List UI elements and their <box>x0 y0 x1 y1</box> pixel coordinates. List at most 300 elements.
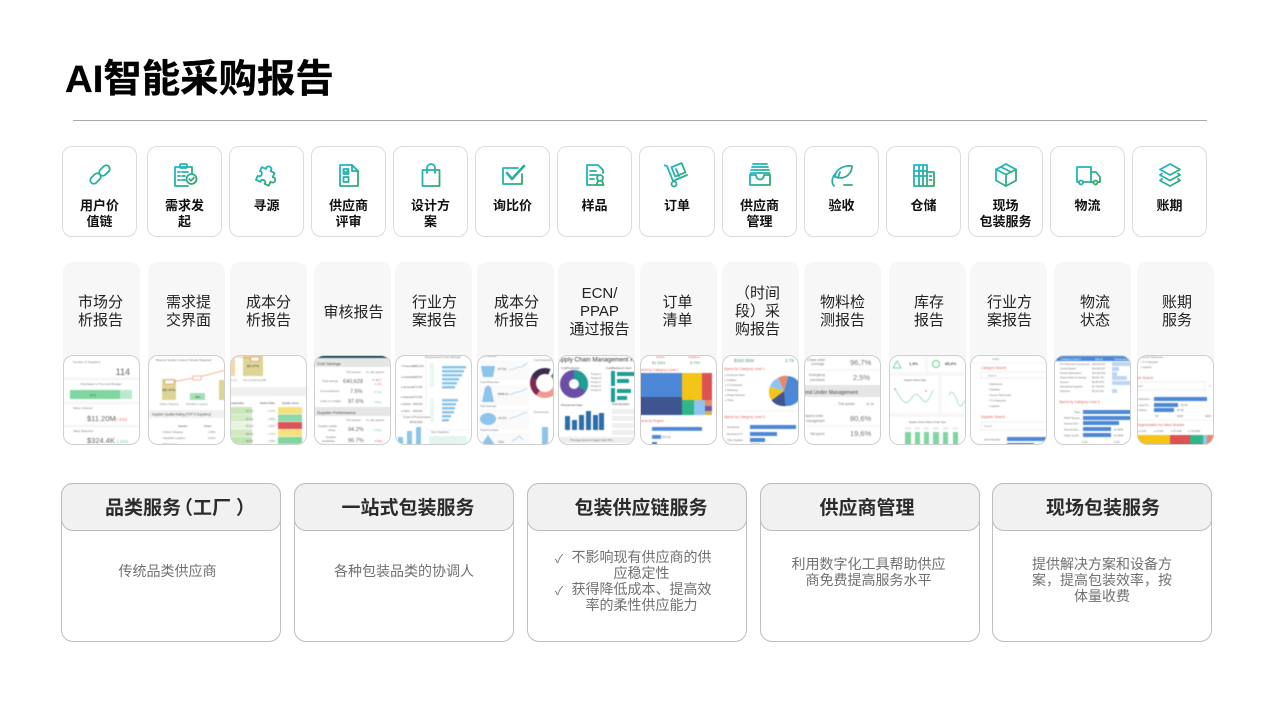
report column: 行业方案报告 <box>395 294 472 445</box>
dashboard thumbnail: segmentation: Segmentation by Value Bracket <box>1137 423 1184 427</box>
heading: 状态 <box>1080 312 1110 329</box>
dashboard thumbnail: category table: $1.9M/M <box>1114 434 1123 438</box>
dashboard thumbnail: quality table: 1.85% <box>268 439 276 443</box>
panel: 现场包装服务 <box>992 483 1212 642</box>
dashboard thumbnail: quality table: 1.97% <box>268 409 276 413</box>
dashboard thumbnail: supplier numbers: Value Ordered <box>73 406 93 410</box>
dashboard thumbnail: savings KPIs with donut: 73% <box>498 440 504 444</box>
process row <box>62 146 1207 237</box>
card: 样品 <box>557 146 632 237</box>
dashboard thumbnail: supply chain KPI: Cost/Production <box>561 366 580 370</box>
heading: 通过报告 <box>569 321 630 338</box>
heading: 库存 <box>914 294 944 311</box>
dashboard thumbnail: supply chain KPI: Product B <box>591 377 602 380</box>
heading <box>1137 262 1214 362</box>
panel heading: 供应商管理 <box>819 498 914 519</box>
dashboard thumbnail: cost savings: Costs vs. budget <box>320 399 341 403</box>
dashboard thumbnail: supplier numbers: 114 <box>116 367 130 377</box>
dashboard thumbnail: segmentation: ↗ <box>1208 383 1211 388</box>
report column: 账期服务 <box>1137 294 1214 445</box>
label: 值链 <box>86 214 112 229</box>
heading: 案报告 <box>987 312 1032 329</box>
heading: 订单 <box>662 294 692 311</box>
icon: link <box>89 164 111 185</box>
heading <box>477 262 554 362</box>
dashboard thumbnail: vendor costs: Supplier <box>178 424 188 428</box>
dashboard thumbnail: segmentation: $10M <box>1177 415 1183 418</box>
card: 仓储 <box>886 146 961 237</box>
dashboard thumbnail: segmentation: tro Electr... <box>1137 409 1149 412</box>
label: 询比价 <box>493 198 532 213</box>
icon: buildings <box>913 164 935 187</box>
label: 验收 <box>828 198 854 213</box>
panel text: 各种包装品类的协调人 <box>334 563 474 579</box>
panel heading <box>527 483 747 531</box>
dashboard thumbnail: cost savings: Supplier quality <box>318 424 338 428</box>
dashboard thumbnail: supplier numbers: Number of Suppliers <box>73 360 101 364</box>
dashboard thumbnail: procurement cost savings: €532,500 <box>410 420 423 424</box>
dashboard thumbnail: vendor costs: • WorldNet Logistics <box>162 436 186 440</box>
dashboard thumbnail: procurement cost savings: €65,000 <box>413 409 423 413</box>
dashboard thumbnail: segmentation: ▫ Logistics <box>1140 365 1152 369</box>
heading <box>558 262 635 362</box>
dashboard thumbnail: quality table: 88.2% <box>246 439 254 443</box>
dashboard thumbnail: procurement cost savings: €72,500 <box>413 385 423 389</box>
dashboard thumbnail: segmentation: ● 10-50k <box>1154 430 1164 433</box>
dashboard thumbnail: category table: Printed Fabrications <box>1060 372 1082 375</box>
heading: 析报告 <box>246 312 291 329</box>
dashboard thumbnail: vendor costs: $2K (47%) <box>162 388 176 392</box>
dashboard thumbnail: stock lines: Supplier Defect Rate <box>904 379 927 382</box>
dashboard thumbnail: vendor costs: 1.96% <box>208 430 216 434</box>
dashboard thumbnail: segmentation: ● 100-500k <box>1188 430 1201 433</box>
heading <box>230 262 307 362</box>
dashboard thumbnail: procurement cost savings: €566,200 <box>413 364 424 368</box>
dashboard thumbnail: segmentation <box>1137 355 1214 445</box>
dashboard thumbnail: pie chart: ● Production Parts <box>725 374 746 377</box>
dashboard thumbnail: category table: Pre-Fabricated Components <box>1060 363 1091 366</box>
label <box>165 198 204 229</box>
label: 现场 <box>992 198 1018 213</box>
dashboard thumbnail: segmentation: $20M <box>1205 415 1211 418</box>
dashboard thumbnail: spend under management: purchases <box>810 378 825 382</box>
dashboard thumbnail: treemap: Orders <box>656 355 665 359</box>
dashboard thumbnail: pie chart: ● Private Business <box>725 394 746 397</box>
card: 询比价 <box>475 146 550 237</box>
dashboard thumbnail: procurement cost savings: Costs of Procurement <box>403 415 430 419</box>
icon: truck <box>1076 166 1101 186</box>
dashboard thumbnail: category table: Tapes <box>1074 411 1081 414</box>
heading <box>722 262 799 362</box>
panel: 供应商管理 <box>760 483 980 642</box>
dashboard thumbnail: supplier numbers: (-1%) <box>117 439 129 444</box>
dashboard thumbnail: category table: 5.0M <box>1114 441 1119 444</box>
dashboard thumbnail: pie chart: ● Marketing <box>725 389 738 392</box>
dashboard thumbnail: vendor costs: WorldNet Logistics <box>186 402 208 406</box>
dashboard thumbnail: supplier numbers <box>63 355 140 445</box>
panel heading <box>992 483 1212 531</box>
heading <box>1054 262 1131 362</box>
dashboard thumbnail: supplier numbers: 81% <box>90 393 96 397</box>
dashboard thumbnail: stock lines: Supplier Defect Rate & Order Type <box>909 421 947 424</box>
report column: 订单清单 <box>640 294 717 445</box>
dashboard thumbnail: segmentation: ▫ Human Resources <box>1140 355 1164 359</box>
dashboard thumbnail: spend under management: 2,5% <box>853 373 870 382</box>
dashboard thumbnail: vendor costs: Defect <box>204 424 212 428</box>
panel: 包装供应链服务 <box>527 483 747 642</box>
dashboard thumbnail: pie chart: ● Facilities <box>725 379 737 382</box>
report column: 审核报告 <box>314 304 391 445</box>
dashboard thumbnail: pie chart: ● Travel <box>725 399 734 402</box>
dashboard thumbnail: cost savings: ▼ 4677 <box>372 378 382 382</box>
dashboard thumbnail: vendor costs: Supplier Quality Rating (TOP 5 Suppliers) <box>152 412 211 416</box>
card: 供应商管理 <box>722 146 797 237</box>
label: 设计方 <box>411 198 450 213</box>
dashboard thumbnail: spend under management: vs. la <box>866 402 874 406</box>
report column: 库存报告 <box>889 294 966 445</box>
dashboard thumbnail: category search: ▫ Facilities <box>988 388 1000 392</box>
label: 用户价 <box>80 198 119 213</box>
panel checklist <box>555 549 712 613</box>
dashboard thumbnail: cost savings: availability <box>322 439 336 443</box>
heading: 行业方 <box>412 294 457 311</box>
label: 包装服务 <box>979 214 1032 229</box>
heading: 账期 <box>1162 294 1192 311</box>
dashboard thumbnail: supply chain KPI: Product C <box>591 381 602 384</box>
dashboard thumbnail: category table: Pallets and Pr... <box>1064 434 1081 438</box>
icon: puzzle <box>255 166 276 187</box>
dashboard thumbnail: supplier numbers: $324.4K <box>87 436 115 445</box>
panel text: 案，提高包装效率，按 <box>1032 572 1172 588</box>
dashboard thumbnail: supply chain KPI: Procurement Data <box>561 403 583 407</box>
dashboard thumbnail: category search: Search <box>988 374 997 378</box>
heading: 购报告 <box>735 321 780 338</box>
heading: 案报告 <box>412 312 457 329</box>
heading: ECN/ <box>582 285 617 302</box>
heading: 服务 <box>1162 312 1192 329</box>
dashboard thumbnail: category table: Security Serv... <box>1064 422 1080 426</box>
dashboard thumbnail: spend under management: 80,6% <box>850 414 872 423</box>
dashboard thumbnail: spend under management: This quarter <box>838 402 856 406</box>
dashboard thumbnail: procurement cost savings: ● Services <box>401 385 414 389</box>
dashboard thumbnail: category search: Search <box>984 424 993 428</box>
panel checklist: 不影响现有供应商的供 <box>572 549 712 565</box>
label <box>329 198 368 229</box>
label: 订单 <box>664 198 690 213</box>
panel checklist: 应稳定性 <box>614 565 670 581</box>
dashboard thumbnail: quality table: ce Co <box>230 378 237 382</box>
dashboard thumbnail: pie chart: Electrical & TC <box>727 433 743 436</box>
dashboard thumbnail: supply chain KPI: Product D <box>591 385 602 388</box>
dashboard thumbnail: quality table <box>230 355 307 445</box>
panel text: 传统品类供应商 <box>118 563 216 579</box>
dashboard thumbnail: supply chain KPI: Product E <box>591 389 602 392</box>
card: 现场包装服务 <box>968 146 1043 237</box>
dashboard thumbnail: cost savings: Supplier Performance <box>317 410 356 415</box>
dashboard thumbnail: spend under management: 19,6% <box>850 429 872 438</box>
heading: 析报告 <box>78 312 123 329</box>
panel: 品类服务（工厂） <box>61 483 281 642</box>
icon: cube <box>995 163 1017 187</box>
dashboard thumbnail: pie chart: Spend by Category Level 3 <box>724 415 765 419</box>
dashboard thumbnail: category table: Category Level 3 <box>1061 357 1081 361</box>
dashboard thumbnail: savings KPIs with donut: Year Savings <box>480 404 497 408</box>
label: 管理 <box>746 214 772 229</box>
heading: 析报告 <box>494 312 539 329</box>
card: 设计方案 <box>393 146 468 237</box>
dashboard thumbnail: cost savings: €40,628 <box>343 379 363 385</box>
dashboard thumbnail: category table: Transactions <box>1114 357 1129 361</box>
dashboard thumbnail: supplier numbers: Purchases in Time and Budget <box>81 382 122 386</box>
heading: PPAP <box>580 303 619 320</box>
label: 案 <box>424 214 437 229</box>
dashboard thumbnail: category table: 0.0M <box>1082 441 1087 444</box>
dashboard thumbnail: spend under management: Spend under <box>805 414 824 418</box>
card: 订单 <box>639 146 715 237</box>
label <box>740 198 779 229</box>
heading <box>395 262 472 362</box>
dashboard thumbnail: category table: PMAT Sensors <box>1064 417 1081 420</box>
dashboard thumbnail: pie chart: Mechanical <box>727 426 740 429</box>
dashboard thumbnail: segmentation: 0M <box>1155 415 1158 418</box>
dashboard thumbnail: category table: $14,001,849 <box>1092 372 1106 375</box>
dashboard thumbnail: cost savings: 7.5% <box>350 389 363 395</box>
label <box>979 198 1032 229</box>
panel heading: 现场包装服务 <box>1046 498 1160 519</box>
dashboard thumbnail: supply chain KPI: Total Discipline <box>612 402 630 406</box>
heading: 审核报告 <box>323 304 384 321</box>
dashboard thumbnail: category table: Spend by Category Level 4 <box>1059 400 1100 404</box>
dashboard thumbnail: supply chain KPI <box>558 355 635 445</box>
dashboard thumbnail: vendor costs: Returns Vendor Costs & Vendor Rejected <box>156 358 212 362</box>
card: 需求发起 <box>147 146 222 237</box>
dashboard thumbnail: savings KPIs with donut: Procurement <box>534 410 549 414</box>
heading: （时间 <box>735 285 780 302</box>
heading <box>314 262 391 362</box>
dashboard thumbnail: quality table: 82.4% <box>246 417 254 421</box>
label: 起 <box>178 214 191 229</box>
dashboard thumbnail: segmentation: $5.6M <box>1181 404 1188 407</box>
dashboard thumbnail: cost savings: -1.1% <box>374 382 382 386</box>
dashboard thumbnail: spend under management: 96,7% <box>850 358 872 367</box>
dashboard thumbnail: vendor costs <box>148 355 225 445</box>
panel heading <box>760 483 980 531</box>
dashboard thumbnail: procurement cost savings: ● Mobile <box>401 402 411 406</box>
dashboard thumbnail: cost savings: -9.9pp <box>374 439 383 443</box>
dashboard thumbnail: spend under management: Tail spend <box>810 432 825 436</box>
card: 寻源 <box>229 146 304 237</box>
heading: 测报告 <box>820 312 865 329</box>
dashboard thumbnail: cost savings: 0.9pp <box>374 400 382 404</box>
dashboard thumbnail: quality table: Defect Rate <box>260 401 275 405</box>
icon: clipboard check <box>174 163 198 187</box>
dashboard thumbnail: cost savings <box>314 355 391 445</box>
dashboard thumbnail: segmentation: ● 0-10k <box>1138 430 1147 433</box>
dashboard thumbnail: category search: Category Search <box>981 366 1007 370</box>
panel checklist: 率的柔性供应能力 <box>586 597 698 613</box>
dashboard thumbnail: savings KPIs with donut: Cost Reduction <box>534 358 552 362</box>
heading <box>148 262 225 362</box>
dashboard thumbnail: category table: Spend <box>1095 357 1103 361</box>
heading <box>970 262 1047 362</box>
label: 账期 <box>1156 198 1182 213</box>
dashboard thumbnail: segmentation: ▫ IT & Networks <box>1140 360 1159 364</box>
heading <box>63 262 140 362</box>
dashboard thumbnail: cost savings: Cost avoidance <box>320 389 340 393</box>
heading: 行业方 <box>987 294 1032 311</box>
dashboard thumbnail: supply chain KPI: Cost/Backlog & Count <box>606 366 632 370</box>
dashboard thumbnail: spend under management <box>804 355 881 445</box>
dashboard thumbnail: cost savings: 96.7% <box>348 438 364 444</box>
dashboard thumbnail: procurement cost savings: Procurement Cost Savings <box>425 355 461 359</box>
dashboard thumbnail: treemap: Suppliers <box>688 355 700 359</box>
dashboard thumbnail: stock lines <box>889 355 966 445</box>
label: 物流 <box>1074 198 1100 213</box>
card: 账期 <box>1132 146 1207 237</box>
dashboard thumbnail: cost savings: 94.2% <box>348 427 364 433</box>
icon: checked box <box>502 164 526 185</box>
dashboard thumbnail: category table: $7,749,643 <box>1092 386 1105 388</box>
dashboard thumbnail: cost savings: vs. last quarter <box>366 418 384 422</box>
panel heading <box>294 483 514 531</box>
card: 供应商评审 <box>311 146 386 237</box>
dashboard thumbnail: procurement cost savings <box>395 355 472 445</box>
dashboard thumbnail: segmentation: $4.1M <box>1177 409 1184 412</box>
icon: hand truck <box>664 162 688 188</box>
dashboard thumbnail: supplier numbers: (+2%) <box>115 417 128 422</box>
dashboard thumbnail: treemap: 6,792 <box>690 360 701 365</box>
icon: inbox tray <box>749 163 771 186</box>
heading: 成本分 <box>246 294 291 311</box>
card: 验收 <box>804 146 879 237</box>
dashboard thumbnail: category table: Sensors <box>1060 381 1070 384</box>
dashboard thumbnail: quality table: 1.85% <box>268 417 276 421</box>
dashboard thumbnail: pie chart: $182.5bM <box>734 358 754 363</box>
dashboard thumbnail: treemap <box>640 355 717 445</box>
dashboard thumbnail: spend under management: end Under Management <box>804 390 859 396</box>
dashboard thumbnail: supply chain KPI: This page shows the Supply Chain KPIs <box>570 439 613 442</box>
report column: 行业方案报告 2 <box>970 294 1047 445</box>
dashboard thumbnail: savings KPIs with donut <box>477 355 554 445</box>
label: 样品 <box>581 198 608 213</box>
dashboard thumbnail: savings KPIs with donut: Total Purchase <box>480 428 499 432</box>
dashboard thumbnail: category table: $1.9M/M <box>1114 428 1123 432</box>
dashboard thumbnail: category table: Educational Supplies <box>1060 386 1083 388</box>
dashboard thumbnail: treemap: $273.6K <box>662 436 671 439</box>
report column: 需求提交界面 <box>148 294 225 445</box>
label: 需求发 <box>165 198 204 213</box>
dashboard thumbnail: segmentation: ● 50-100k <box>1171 430 1183 433</box>
title: AI智能采购报告 <box>65 58 334 101</box>
report column: 成本分析报告 2 <box>477 294 554 445</box>
dashboard thumbnail: savings KPIs with donut: €985 M <box>498 392 509 396</box>
dashboard thumbnail: treemap: $1.53m <box>652 360 666 365</box>
dashboard thumbnail: quality table: 85.7% <box>246 432 254 436</box>
dashboard thumbnail: category table: Networks <box>1060 390 1071 393</box>
dashboard thumbnail: cost savings: 3.9pp <box>374 428 382 432</box>
dashboard thumbnail: category table: $16,816,251 <box>1092 363 1106 366</box>
dashboard thumbnail: vendor costs: • Globex Shipping <box>162 430 183 434</box>
dashboard thumbnail: category table: $6,413,391 <box>1092 390 1105 393</box>
dashboard thumbnail: supplier numbers: Value Rejected <box>73 429 93 433</box>
icon: feather <box>831 165 853 187</box>
dashboard thumbnail: spend under management: Emergency <box>809 373 826 377</box>
panel heading: 包装供应链服务 <box>574 498 708 519</box>
icon: form document <box>339 164 359 187</box>
heading <box>804 262 881 362</box>
dashboard thumbnail: procurement cost savings: €88,870 <box>413 375 423 379</box>
dashboard thumbnail: savings KPIs with donut: €772K <box>498 367 507 371</box>
report column: 成本分析报告 <box>230 294 307 445</box>
dashboard thumbnail: category search: ▫ Logistics <box>988 404 1000 408</box>
dashboard thumbnail: stock lines: 1,9% <box>909 361 919 366</box>
icon: layers <box>1159 163 1181 187</box>
dashboard thumbnail: vendor costs: $1K <box>196 395 201 399</box>
dashboard thumbnail: category search: Supplier Search <box>981 415 1005 419</box>
dashboard thumbnail: category table: Plastic Molds & Castings <box>1060 376 1087 380</box>
dashboard thumbnail: category table: $14,623,267 <box>1092 368 1106 370</box>
dashboard thumbnail: category table: $9,830,733 <box>1092 376 1105 380</box>
dashboard thumbnail: stock lines: 85,3% <box>945 361 957 366</box>
icon: shopping bag <box>422 163 440 187</box>
dashboard thumbnail: vendor costs: Globex Shipping <box>159 402 179 406</box>
panel: 一站式包装服务 <box>294 483 514 642</box>
dashboard thumbnail: quality table: Quality Score <box>282 401 299 405</box>
dashboard thumbnail: category search <box>970 355 1047 445</box>
heading: 段）采 <box>735 303 780 320</box>
heading: 交界面 <box>166 312 211 329</box>
panel text: 商免费提高服务水平 <box>806 572 932 588</box>
dashboard thumbnail: segmentation: lier Search <box>1137 376 1153 380</box>
heading: 成本分 <box>494 294 539 311</box>
label <box>411 198 450 229</box>
dashboard thumbnail: cost savings: Supplier <box>326 435 336 439</box>
panel heading: 品类服务（工厂 ） <box>105 498 255 519</box>
dashboard thumbnail: pie chart: 2.79 <box>785 358 794 363</box>
dashboard thumbnail: category search: ▫ Human Resources <box>988 393 1012 397</box>
dashboard thumbnail: category search: 4,811 <box>992 357 1000 361</box>
dashboard thumbnail: cost savings: Cost Savings <box>317 361 341 366</box>
dashboard thumbnail: quality table: Non-Conforming BE <box>243 378 266 382</box>
label: 寻源 <box>253 198 280 213</box>
panel heading: 一站式包装服务 <box>341 498 474 519</box>
heading: 物料检 <box>820 294 865 311</box>
dashboard thumbnail: cost savings: This quarter <box>346 418 361 422</box>
dashboard thumbnail: quality table: 87.1% <box>246 424 254 428</box>
heading: 物流 <box>1080 294 1110 311</box>
report column: ECN/PPAP通过报告 <box>558 285 635 445</box>
panel checklist: 获得降低成本、提高效 <box>572 581 712 597</box>
report column: 物料检测报告 <box>804 294 881 445</box>
dashboard thumbnail: procurement cost savings: €72,000 <box>413 395 423 399</box>
panel text: 提供解决方案和设备方 <box>1032 556 1172 572</box>
heading <box>640 262 717 362</box>
dashboard thumbnail: treemap: pend by Category Level 1 <box>640 368 679 372</box>
dashboard thumbnail: procurement cost savings: Top 5 Suppliers <box>431 430 450 434</box>
dashboard thumbnail: procurement cost savings: ● Office <box>401 409 411 413</box>
label <box>80 198 119 229</box>
heading: 市场分 <box>78 294 123 311</box>
dashboard thumbnail: spend under management: Chase under <box>807 358 826 362</box>
dashboard thumbnail: quality table: 1.65% <box>268 424 276 428</box>
dashboard thumbnail: supply chain KPI: Product A <box>591 373 601 376</box>
dashboard thumbnail: pie chart: ● IT & Networks <box>725 384 743 387</box>
label: 供应商 <box>740 198 779 213</box>
dashboard thumbnail: cost savings: rating <box>328 428 335 432</box>
dashboard thumbnail: pie chart <box>722 355 799 445</box>
panel text: 利用数字化工具帮助供应 <box>792 556 946 572</box>
dashboard thumbnail: category table <box>1054 355 1131 445</box>
